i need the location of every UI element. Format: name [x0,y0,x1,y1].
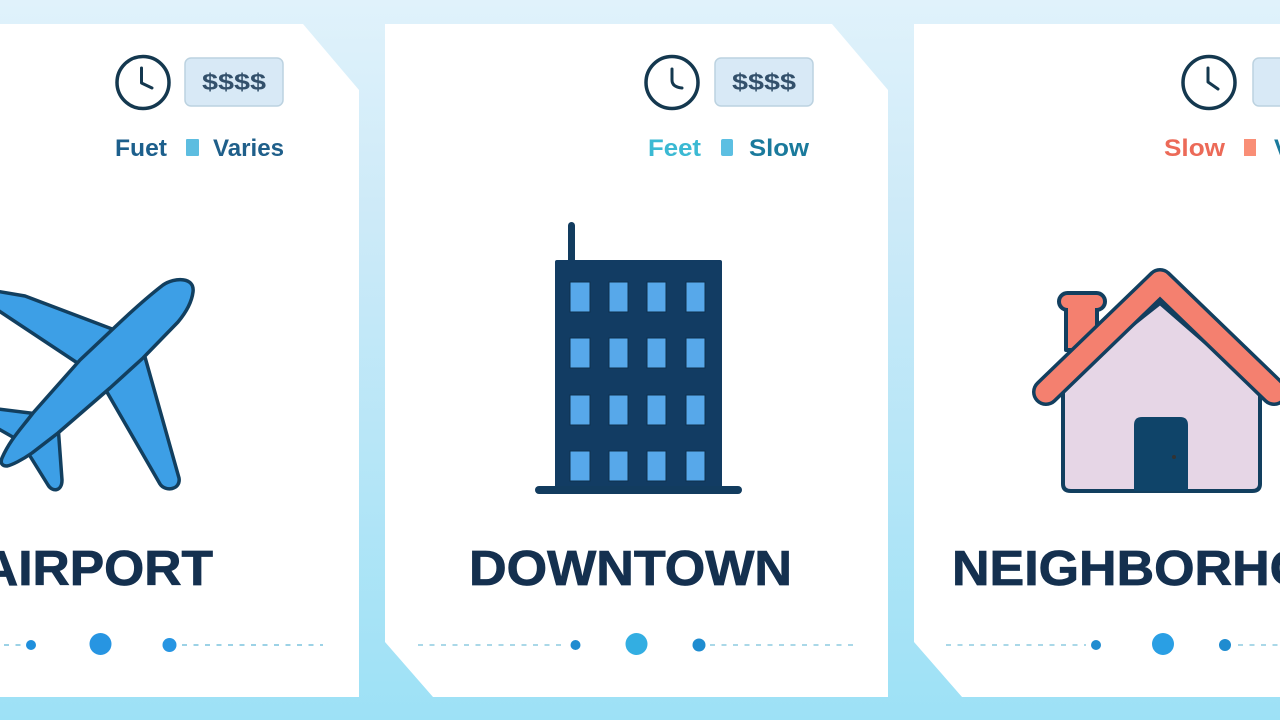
progress dots: neighborhood [946,633,1280,655]
cost badge [185,58,283,106]
panel: neighborhood card [914,24,1280,697]
heading: downtown: DOWNTOWN [469,541,792,596]
icon: airplane [0,280,193,490]
legend: feet and slow: Feet [648,135,701,162]
progress dots: downtown [418,633,853,655]
legend: fuet and varies: Fuet [115,135,167,162]
progress dots: airport [4,633,323,655]
legend: fuet and varies: Varies [213,135,284,162]
cost badge: $$$$ [732,69,796,95]
panel: airport card [0,24,359,697]
cost badge: $$$$ [202,69,266,95]
legend: fuet and varies [115,135,284,162]
icon: office building [535,222,742,494]
panel: downtown card [385,24,888,697]
icon: clock [117,56,169,108]
icon: clock [1183,56,1235,108]
icon: clock [646,56,698,108]
icon: house [1046,282,1274,491]
cost badge [715,58,813,106]
legend: feet and slow: Slow [749,135,809,162]
legend: feet and slow [648,135,809,162]
legend: slow [1164,135,1280,162]
cost badge [1253,58,1280,106]
legend: slow: Slow [1164,135,1225,162]
